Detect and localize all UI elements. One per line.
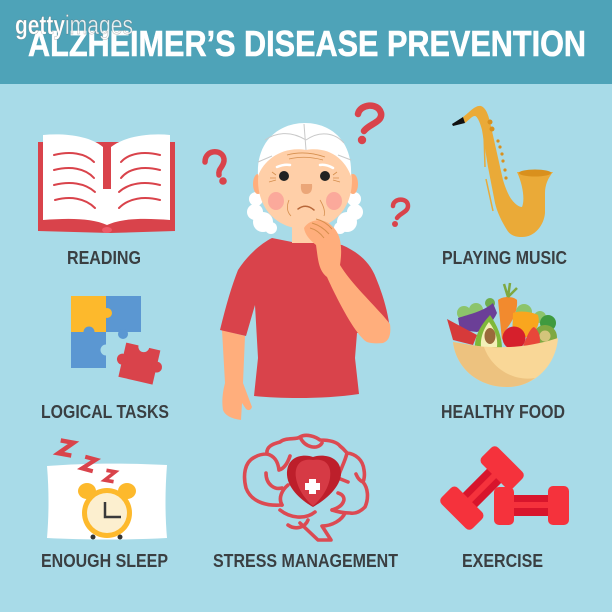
label: stress management: STRESS MANAGEMENT — [213, 551, 398, 571]
watermark: images — [65, 10, 133, 40]
label: exercise: EXERCISE — [462, 551, 543, 571]
blush — [268, 192, 284, 210]
right arm with hand — [304, 220, 390, 343]
eyes — [279, 171, 289, 181]
red shirt — [220, 238, 390, 398]
brows — [277, 165, 333, 168]
ears — [253, 174, 263, 194]
left arm — [222, 330, 252, 420]
icon: puzzle pieces — [71, 296, 167, 386]
icon: dumbbells — [438, 444, 569, 532]
face — [258, 145, 352, 229]
label: playing music: PLAYING MUSIC — [442, 248, 567, 268]
icon: brain with heart — [245, 435, 367, 540]
question marks — [205, 106, 408, 218]
hair curls — [247, 192, 363, 234]
neck — [292, 222, 320, 243]
watermark — [15, 10, 133, 40]
icon: pillow and alarm clock — [47, 440, 167, 540]
label: logical tasks: LOGICAL TASKS — [41, 402, 169, 422]
watermark: getty — [15, 10, 65, 40]
mouth — [298, 206, 314, 210]
hair top — [258, 123, 351, 176]
wrinkles — [269, 153, 340, 216]
label: enough sleep: ENOUGH SLEEP — [41, 551, 168, 571]
icon: bowl of healthy food — [447, 283, 558, 387]
label: healthy food: HEALTHY FOOD — [441, 402, 565, 422]
header band — [0, 0, 612, 84]
icon: saxophone — [452, 106, 553, 237]
icon: open book — [38, 134, 175, 233]
nose — [301, 184, 312, 194]
label: reading: READING — [67, 248, 141, 268]
illustration: thinking elderly woman — [205, 106, 408, 420]
